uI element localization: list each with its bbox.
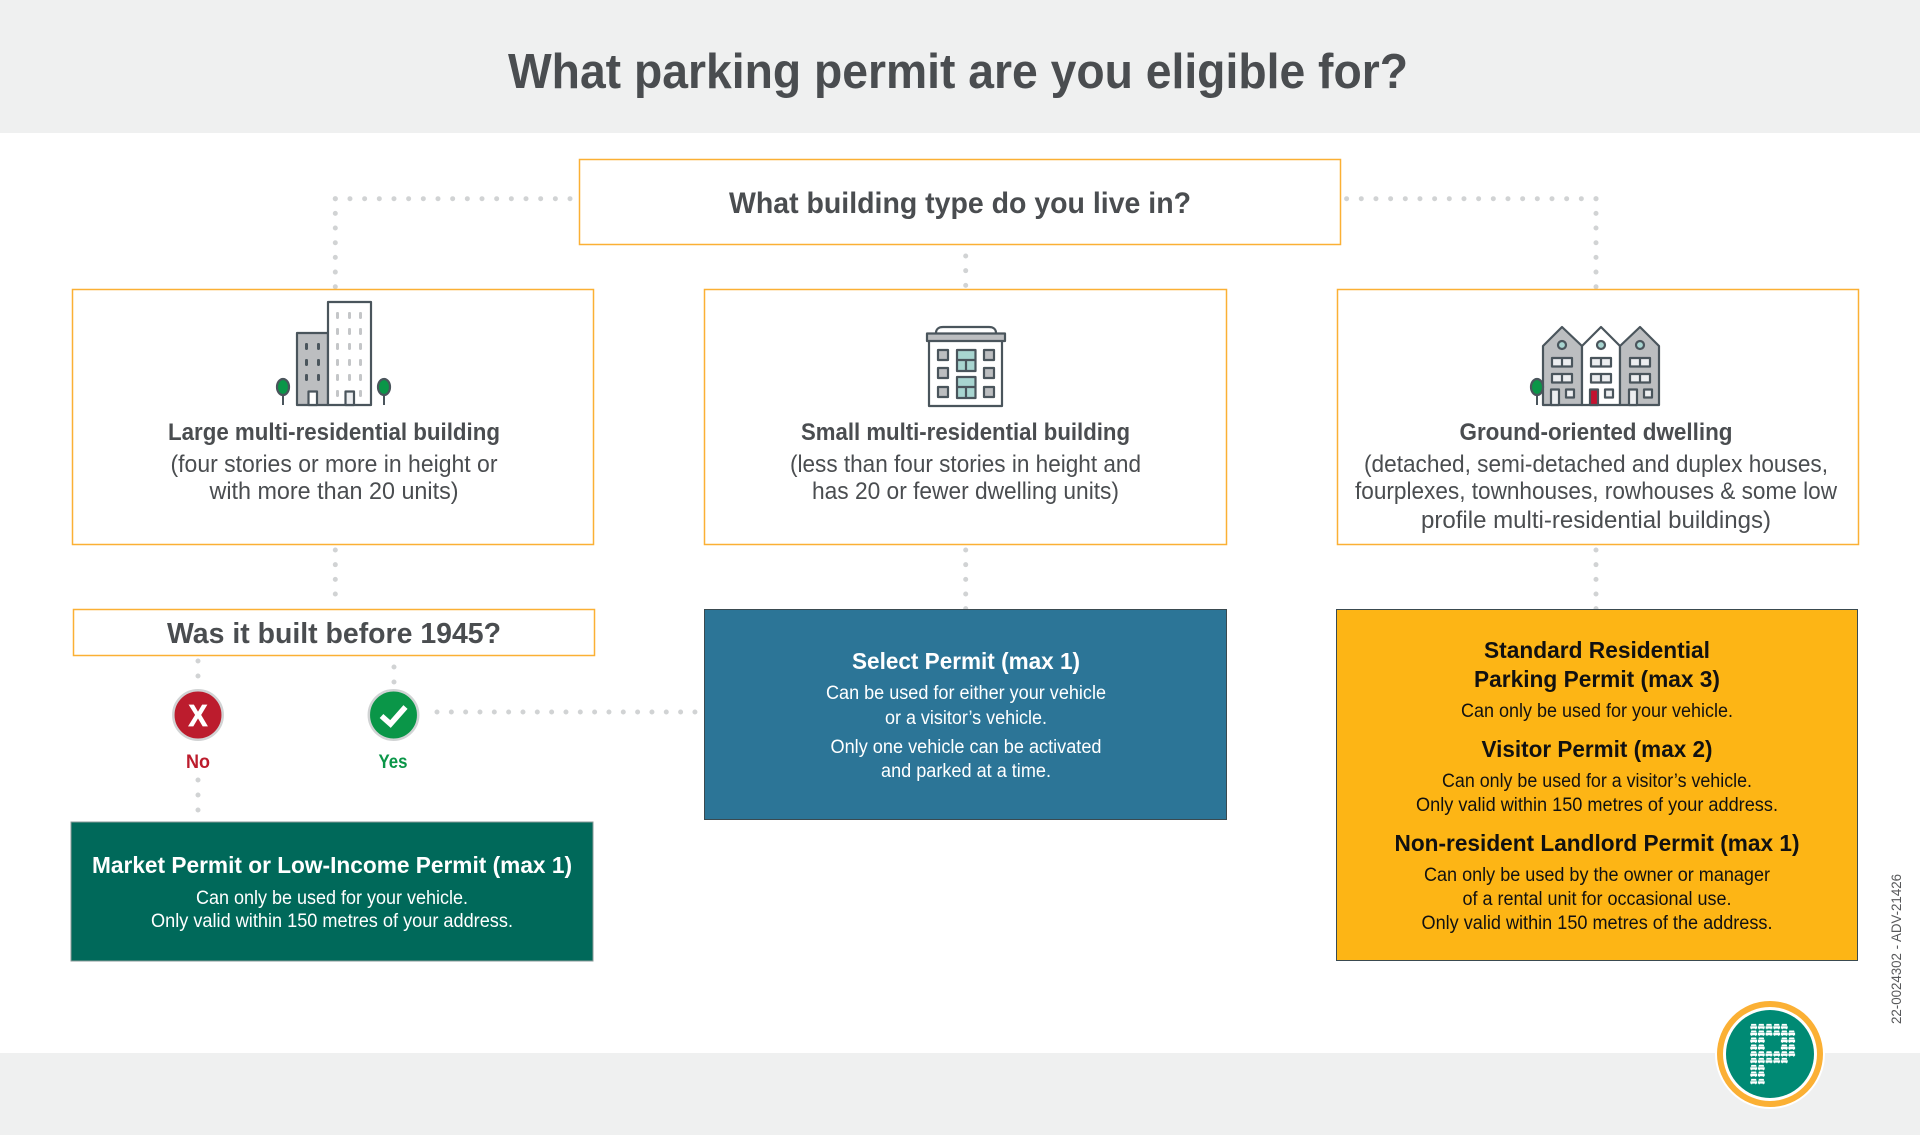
visitor permit <box>1416 736 1778 816</box>
question box: building type: What building type do you live in? <box>729 187 1191 220</box>
icon: row houses with tree <box>1531 327 1659 405</box>
non-resident landlord permit: Can only be used by the owner or manager <box>1424 865 1771 886</box>
standard residential permit <box>1461 637 1733 722</box>
non-resident landlord permit: Non-resident Landlord Permit (max 1) <box>1394 830 1800 856</box>
panel: small multi-residential building <box>704 290 1226 544</box>
visitor permit: Can only be used for a visitor’s vehicle. <box>1442 771 1752 792</box>
panel description: (less than four stories in height and <box>790 451 1141 478</box>
non-resident landlord permit <box>1394 830 1800 934</box>
permit box: select permit: or a visitor’s vehicle. <box>885 708 1047 729</box>
permit box: standard, visitor, landlord <box>1336 610 1858 960</box>
panel description: profile multi-residential buildings) <box>1421 507 1771 534</box>
document code: 22-0024302 - ADV-21426 <box>1888 874 1904 1024</box>
visitor permit: Visitor Permit (max 2) <box>1482 736 1712 762</box>
footer band <box>0 1053 1920 1135</box>
icon: tall buildings with trees <box>277 302 390 405</box>
panel heading: Large multi-residential building <box>168 419 500 446</box>
answer: yes: Yes <box>378 752 408 773</box>
header band <box>0 0 1920 133</box>
panel heading: Small multi-residential building <box>801 419 1130 446</box>
answer: yes <box>369 690 418 773</box>
standard residential permit: Can only be used for your vehicle. <box>1461 701 1733 722</box>
permit box: select permit: Select Permit (max 1) <box>852 648 1080 674</box>
permit box: select permit <box>704 610 1226 820</box>
standard residential permit: Parking Permit (max 3) <box>1474 666 1720 692</box>
permit box: market or low-income: Market Permit or Low-Income Permit (max 1) <box>92 852 572 878</box>
permit box: select permit: and parked at a time. <box>881 761 1051 782</box>
non-resident landlord permit: Only valid within 150 metres of the address. <box>1422 913 1772 934</box>
question box: built before 1945 <box>74 610 594 656</box>
permit box: select permit: Can be used for either your vehicle <box>826 683 1106 704</box>
question box: building type <box>580 160 1340 244</box>
panel description: (detached, semi-detached and duplex houses, <box>1364 451 1828 478</box>
panel description: has 20 or fewer dwelling units) <box>812 478 1119 505</box>
permit box: market or low-income: Only valid within 150 metres of your address. <box>151 911 513 932</box>
panel: large multi-residential building <box>72 290 594 544</box>
question box: built before 1945: Was it built before 1945? <box>167 618 501 650</box>
answer: no <box>173 690 223 773</box>
panel description <box>790 451 1141 505</box>
panel heading: Ground-oriented dwelling <box>1460 419 1732 446</box>
permit box: market or low-income: Can only be used for your vehicle. <box>196 888 468 909</box>
standard residential permit: Standard Residential <box>1484 637 1710 663</box>
non-resident landlord permit: of a rental unit for occasional use. <box>1462 889 1732 910</box>
panel description <box>170 451 498 505</box>
answer: no: No <box>186 752 210 773</box>
answer: no: X <box>188 698 208 733</box>
icon: low-rise apartment <box>927 327 1005 406</box>
panel description <box>1355 451 1838 534</box>
title: What parking permit are you eligible for? <box>508 45 1408 99</box>
panel description: with more than 20 units) <box>209 478 458 505</box>
visitor permit: Only valid within 150 metres of your address. <box>1416 795 1778 816</box>
logo: parking P made of cars <box>1715 999 1825 1109</box>
panel description: (four stories or more in height or <box>170 451 498 478</box>
panel: ground-oriented dwelling <box>1338 290 1858 544</box>
connectors: dotted flow lines <box>198 199 1596 815</box>
permit box: select permit: Only one vehicle can be activated <box>830 737 1102 758</box>
permit box: market or low-income <box>71 822 593 961</box>
panel description: fourplexes, townhouses, rowhouses & some low <box>1355 478 1838 505</box>
